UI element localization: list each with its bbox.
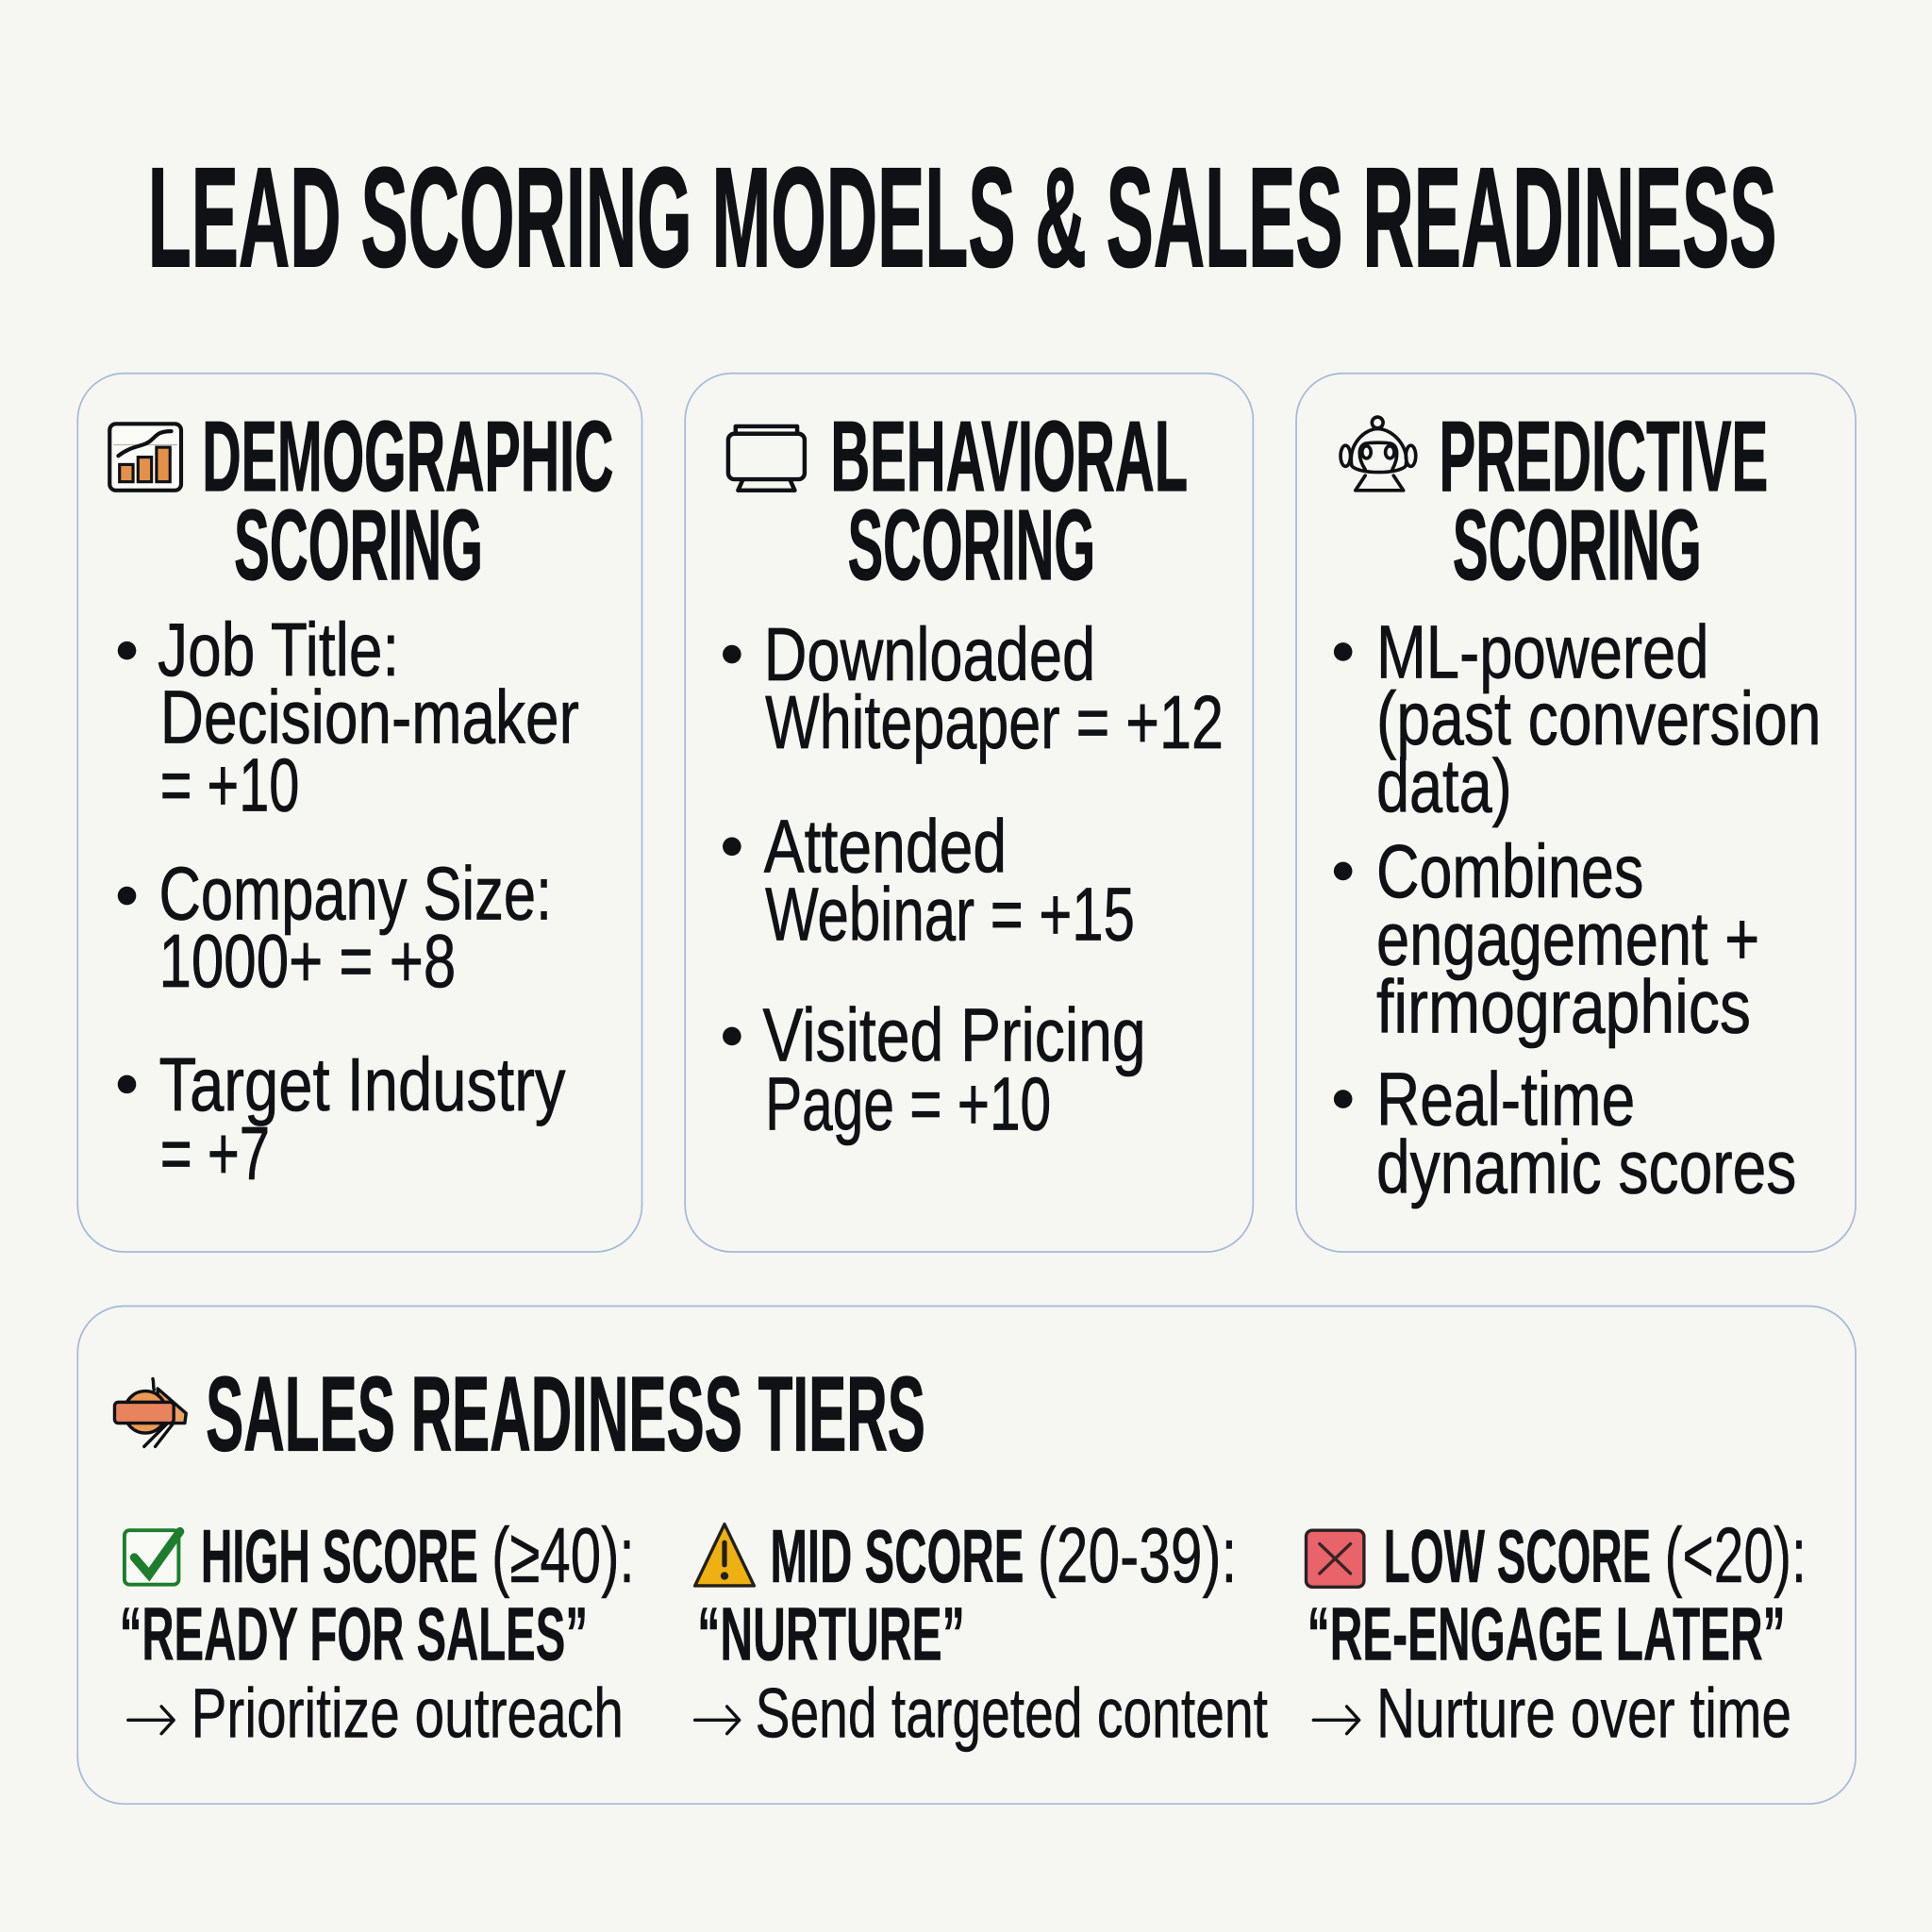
heading: demographic scoring — [202, 401, 613, 601]
tier: high score: “READY FOR SALES” — [120, 1591, 588, 1675]
list: behavioral criteria: Attended — [764, 805, 1007, 889]
icon: warning triangle — [695, 1524, 754, 1586]
tier: mid score: MID SCORE — [770, 1514, 1024, 1598]
heading: demographic scoring: DEMOGRAPHIC — [202, 401, 613, 512]
list: demographic criteria: Job Title: — [158, 608, 399, 691]
tier: high score — [120, 1513, 635, 1753]
tier: high score: HIGH SCORE — [201, 1514, 478, 1598]
list: predictive criteria: engagement + — [1376, 897, 1759, 981]
list: behavioral criteria — [723, 612, 1224, 1146]
heading: behavioral scoring: SCORING — [848, 490, 1095, 601]
list: predictive criteria: Real-time — [1376, 1057, 1635, 1141]
tier: mid score: “NURTURE” — [697, 1591, 965, 1675]
heading: demographic scoring: SCORING — [234, 490, 483, 601]
tier: low score: LOW SCORE — [1384, 1514, 1651, 1598]
list: predictive criteria — [1334, 609, 1821, 1208]
panel: predictive scoring — [1296, 374, 1856, 1252]
list: demographic criteria: = +10 — [160, 742, 299, 826]
tier: mid score: (20-39): — [1038, 1513, 1237, 1599]
icon: bar chart — [109, 424, 181, 491]
heading: predictive scoring — [1440, 401, 1768, 601]
heading: sales readiness tiers: SALES READINESS TIERS — [206, 1354, 925, 1473]
panel: behavioral scoring — [685, 374, 1253, 1252]
list: behavioral criteria: Whitepaper = +12 — [765, 680, 1224, 764]
list: behavioral criteria: Downloaded — [764, 612, 1095, 696]
heading: behavioral scoring — [830, 401, 1188, 601]
tier: mid score: Send targeted content — [756, 1674, 1268, 1753]
list: predictive criteria: dynamic scores — [1376, 1124, 1796, 1208]
icon: sales readiness — [114, 1379, 186, 1446]
list: predictive criteria: (past conversion — [1376, 676, 1821, 760]
list: demographic criteria: Company Size: — [158, 851, 552, 935]
tier: low score — [1306, 1513, 1807, 1753]
panel: sales readiness tiers — [77, 1306, 1856, 1804]
heading: behavioral scoring: BEHAVIORAL — [830, 401, 1188, 512]
tier: mid score — [695, 1513, 1268, 1753]
icon: green check — [125, 1530, 180, 1585]
list: behavioral criteria: Page = +10 — [765, 1062, 1051, 1146]
tier: low score: Nurture over time — [1376, 1674, 1791, 1753]
tier: high score: Prioritize outreach — [191, 1674, 624, 1753]
icon: monitor — [728, 426, 805, 491]
heading: predictive scoring: SCORING — [1453, 490, 1702, 601]
list: behavioral criteria: Webinar = +15 — [765, 873, 1135, 957]
icon: red cross — [1306, 1530, 1364, 1587]
list: demographic criteria — [118, 608, 579, 1195]
icon: robot — [1341, 417, 1416, 491]
list: predictive criteria: firmographics — [1376, 965, 1751, 1049]
list: demographic criteria: 1000+ = +8 — [158, 919, 456, 1003]
list: demographic criteria: Target Industry — [158, 1042, 566, 1126]
tier: low score: (<20): — [1665, 1513, 1807, 1599]
list: demographic criteria: = +7 — [160, 1111, 270, 1195]
list: predictive criteria: Combines — [1376, 829, 1643, 913]
list: predictive criteria: data) — [1376, 744, 1512, 828]
tier: high score: (≥40): — [491, 1513, 635, 1599]
list: behavioral criteria: Visited Pricing — [762, 993, 1146, 1077]
list: predictive criteria: ML-powered — [1376, 609, 1709, 693]
list: demographic criteria: Decision-maker — [160, 675, 579, 759]
panel: demographic scoring — [77, 374, 641, 1252]
